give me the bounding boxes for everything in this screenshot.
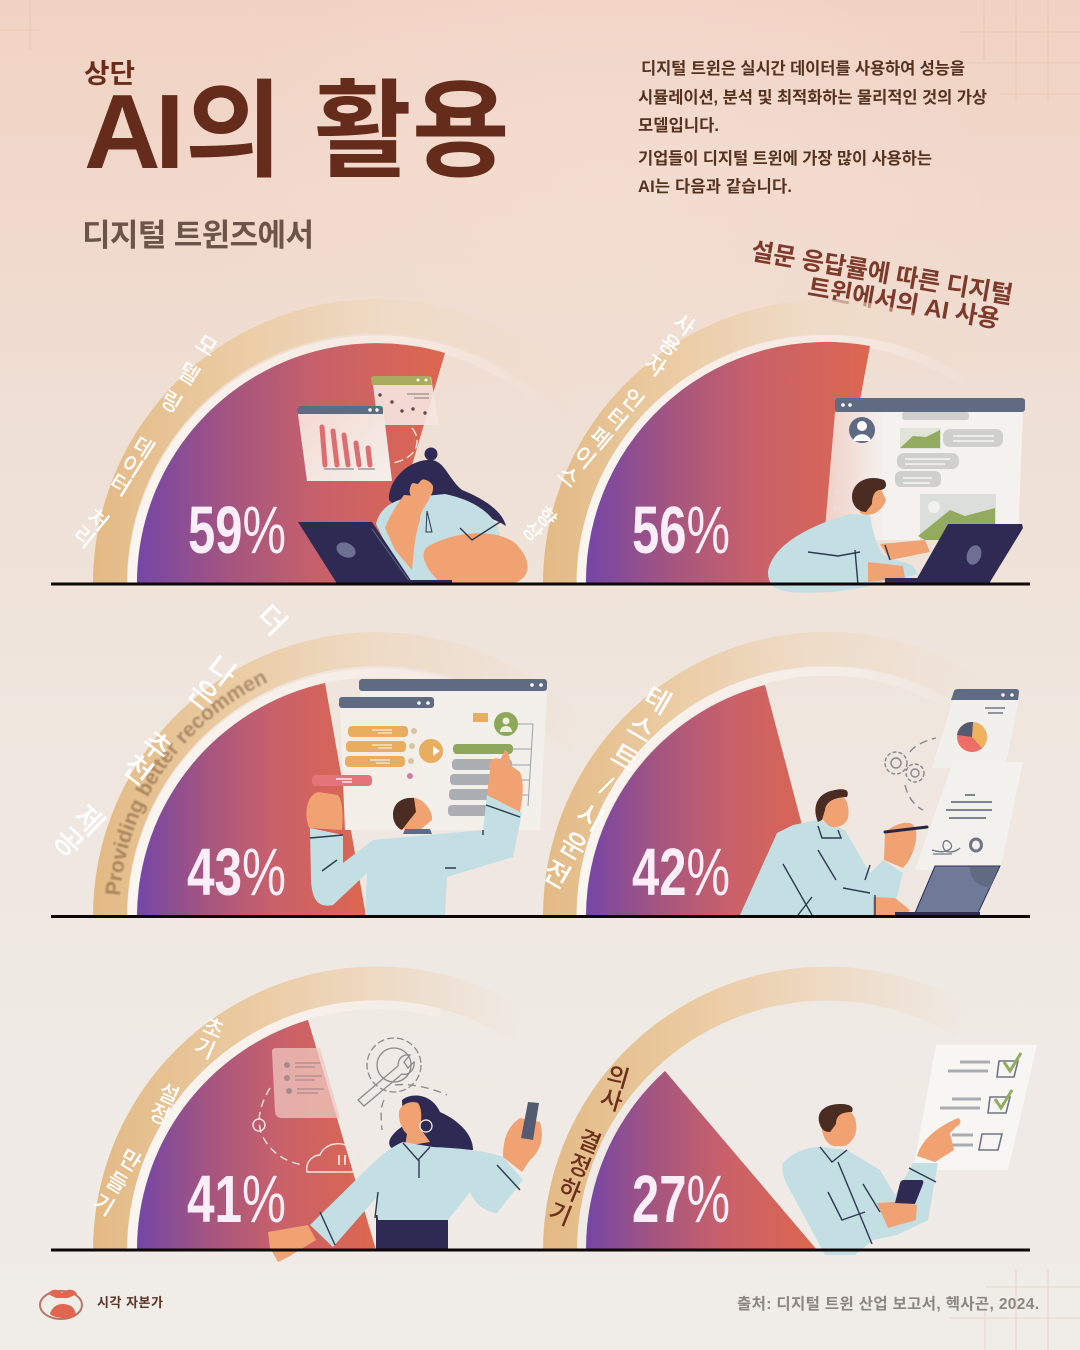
icon: green scatter window [371, 376, 439, 463]
panel: 56% 사용자 인터페이스 향상 [516, 307, 1025, 593]
icon: gear with wrench [358, 1038, 447, 1130]
icon: signed document [915, 762, 1023, 870]
panel: 27% 의사 결정하기 [540, 984, 1037, 1255]
man leaning at laptop [768, 478, 1023, 593]
ring label [516, 307, 700, 544]
ring label: 의사 [592, 1060, 632, 1114]
callout: chart caption: 설문 응답률에 따른 디지털 [749, 237, 1015, 310]
ring label: 모델링 [148, 328, 222, 426]
panel: 42% 테스트/시운전 [533, 649, 1023, 916]
ring label: 초기 [188, 1012, 228, 1062]
ring label: 데이터 [103, 430, 159, 500]
pie wedge [586, 342, 870, 584]
panel: 59% 모델링 데이터 처리 [66, 316, 582, 584]
panel: 43% 더 나은 추천 제공 [44, 595, 547, 915]
ring label: 제공 [44, 795, 110, 862]
subtitle: 디지털 트윈즈에서 [82, 218, 314, 253]
intro text: AI는 다음과 같습니다. [638, 177, 792, 196]
value: 27% [632, 1162, 730, 1237]
intro text: 디지털 트윈은 실시간 데이터를 사용하여 성능을 [641, 59, 965, 78]
icon: checklist card [913, 1045, 1037, 1170]
arc ring [110, 983, 520, 1250]
ring label [540, 1060, 632, 1230]
intro text: 모델입니다. [638, 116, 719, 135]
pie wedge [586, 685, 826, 916]
icon: bar chart window [297, 406, 392, 481]
woman with laptop [298, 448, 528, 584]
arc ring [560, 649, 980, 916]
pie wedge [137, 1020, 376, 1250]
ring label: 향상 [516, 500, 560, 544]
inner glow ring [132, 340, 540, 584]
intro text [638, 59, 987, 196]
ring label: 추천 [114, 721, 176, 789]
ring label: 설정 [142, 1078, 183, 1129]
pie wedge [586, 1071, 817, 1250]
arc ring [110, 649, 582, 916]
value: 56% [632, 493, 730, 568]
source: 출처: 디지털 트윈 산업 보고서, 헥사곤, 2024. [737, 1295, 1039, 1313]
brand name: 시각 자본가 [97, 1295, 163, 1310]
inner glow ring [132, 673, 540, 916]
inner glow ring [581, 671, 950, 916]
ring label: 나은 [179, 646, 241, 714]
value: 41% [187, 1162, 286, 1237]
inner glow ring [581, 339, 975, 584]
ring label [44, 595, 292, 862]
woman with phone [268, 1096, 542, 1262]
intro text: 기업들이 디지털 트윈에 가장 많이 사용하는 [638, 149, 932, 168]
ring label: 처리 [66, 502, 114, 552]
ring label: 사용자 [636, 307, 700, 383]
man writing [740, 789, 1000, 916]
icon: logo mark [40, 1290, 82, 1319]
pie wedge [137, 343, 445, 584]
icon: dashed path and cloud [253, 1088, 361, 1172]
man from behind [306, 750, 523, 915]
icon: pie chart card [932, 689, 1019, 768]
value: 42% [632, 835, 730, 910]
ring label: 더 [247, 595, 292, 640]
icon: gears [885, 738, 936, 810]
inner glow ring [132, 1005, 440, 1250]
ring label: 인터페이스 [549, 382, 649, 494]
main title: AI의 활용 [84, 73, 510, 191]
ring label [66, 328, 222, 552]
icon: profile dashboard window [824, 398, 1025, 540]
ring label: 만들기 [84, 1143, 146, 1223]
engraved ring text: Providing better recommen [105, 672, 268, 895]
arc ring [560, 984, 965, 1250]
value: 43% [187, 835, 286, 910]
baseline rows [51, 582, 1030, 1252]
arc ring [110, 316, 582, 584]
ring label [84, 1012, 228, 1223]
ring label: 테스트/시운전 [533, 679, 677, 897]
panel: 41% 초기 설정 만들기 [84, 983, 542, 1262]
eyebrow: 상단: 상단 [84, 59, 135, 89]
pie wedge [137, 683, 366, 916]
title block [82, 59, 510, 253]
callout: chart caption: 트윈에서의 AI 사용 [806, 273, 1002, 334]
intro text: 시뮬레이션, 분석 및 최적화하는 물리적인 것의 가상 [638, 88, 987, 107]
arc ring [560, 317, 980, 584]
logo [40, 1290, 163, 1319]
icon: workflow windows [312, 679, 547, 830]
value: 59% [188, 493, 286, 568]
icon: list card [272, 1048, 340, 1118]
ring label: 결정하기 [540, 1124, 604, 1230]
man pointing with phone [782, 1104, 960, 1255]
